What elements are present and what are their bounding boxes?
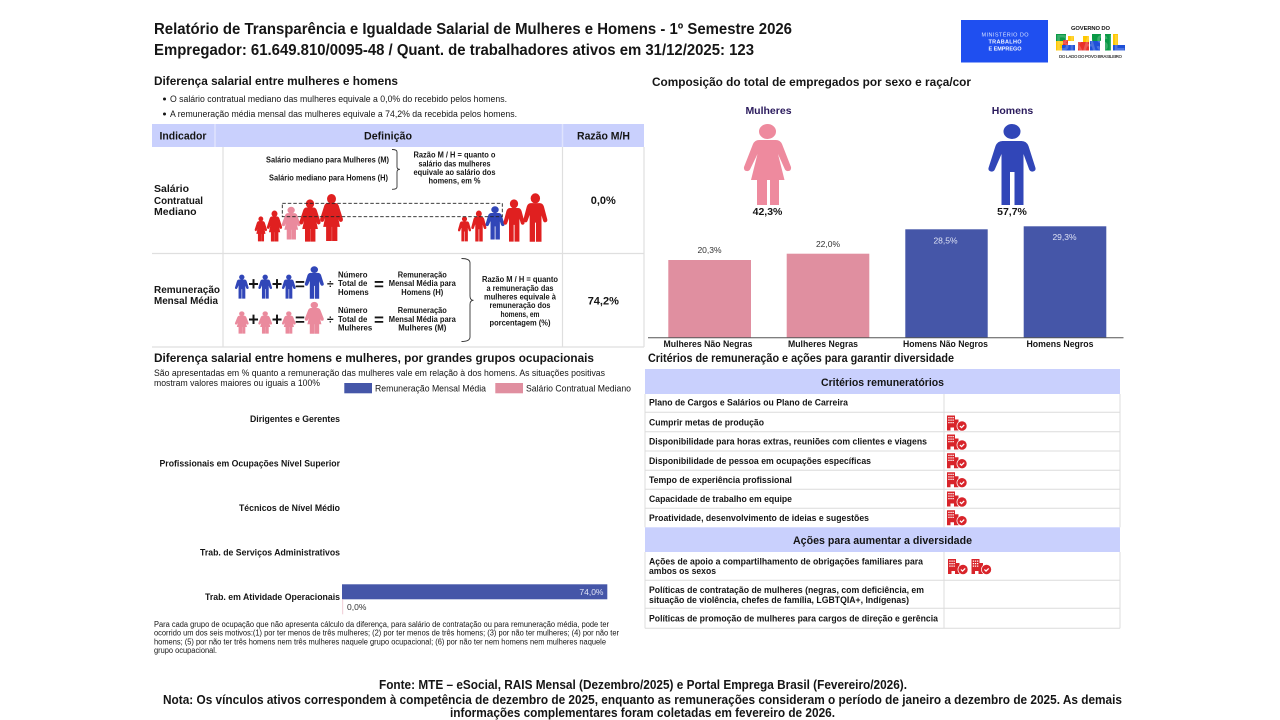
median salary definition: Salário mediano para Mulheres (M): [266, 156, 389, 164]
bar: mulheres não negras: [664, 245, 753, 349]
median salary definition: Razão M / H = quanto o: [414, 150, 496, 160]
logo: Governo do Brasil: GOVERNO DO: [1071, 26, 1110, 32]
bar chart: grupos ocupacionais: Dirigentes e Gerentes: [250, 414, 340, 424]
source and notes: Nota: Os vínculos ativos correspondem à competência de dezembro de 2025, enquanto as remunerações consideram o período de janeiro a dezembro de 2025. As demais: [163, 692, 1122, 707]
actions list: ambos os sexos: [649, 566, 716, 576]
average pay explanation: Razão M / H = quanto: [482, 275, 558, 284]
men average formula: Número: [338, 270, 368, 280]
median salary definition: homens, em %: [428, 176, 481, 186]
women average formula: Mulheres (M): [398, 324, 447, 332]
men average formula: Mensal Média para: [389, 279, 456, 288]
women average formula: ÷: [327, 312, 334, 326]
heading: critérios: Critérios de remuneração e ações para garantir diversidade: [648, 351, 954, 365]
section header: ações: Ações para aumentar a diversidade: [793, 535, 972, 547]
source and notes: Fonte: MTE – eSocial, RAIS Mensal (Dezembro/2025) e Portal Emprega Brasil (Fevereiro/2026).: [379, 677, 907, 692]
bar chart: grupos ocupacionais: Técnicos de Nível Médio: [239, 503, 341, 513]
logo: Ministério do Trabalho e Emprego: TRABALHO: [988, 40, 1022, 46]
table header: Razão M/H: [577, 130, 630, 142]
women average formula: +: [272, 310, 282, 330]
women average formula: Mulheres: [338, 324, 373, 332]
summary bullets: O salário contratual mediano das mulheres equivale a 0,0% do recebido pelos homens.: [170, 94, 507, 104]
chart description: mostram valores maiores ou iguais a 100%: [154, 378, 320, 388]
women average formula: =: [295, 310, 305, 330]
average pay explanation: [462, 258, 558, 342]
men average formula: ÷: [327, 277, 334, 291]
summary bullets: [163, 94, 517, 119]
men average formula: +: [272, 274, 282, 294]
value: razão remuneração média: 74,2%: [588, 296, 619, 308]
table header: Definição: [364, 130, 412, 142]
bar chart: grupos ocupacionais: [160, 414, 607, 614]
men average formula: +: [248, 274, 259, 294]
average pay explanation: mulheres equivale à: [484, 292, 557, 302]
men average formula: Homens (H): [401, 288, 444, 297]
logo: Ministério do Trabalho e Emprego: [961, 20, 1048, 62]
criteria list: [649, 398, 927, 523]
icons: men ranked by salary: [458, 194, 547, 241]
criteria list: Proatividade, desenvolvimento de ideias e sugestões: [649, 513, 869, 523]
logo: Ministério do Trabalho e Emprego: MINISTÉRIO DO: [982, 32, 1029, 38]
heading: ocupacionais: Diferença salarial entre homens e mulheres, por grandes grupos ocupacionais: [154, 351, 594, 365]
panel: indicators table: [152, 124, 644, 347]
logo: Ministério do Trabalho e Emprego: E EMPREGO: [988, 46, 1022, 52]
bar: homens não negros: Homens Não Negros: [903, 339, 988, 349]
criteria list: Capacidade de trabalho em equipe: [649, 494, 792, 504]
footnote: ocorrido um dos seis motivos:(1) por ter menos de três mulheres; (2) por ter menos de três homens; (3) por não ter mulheres; (4) por não ter: [154, 629, 619, 638]
footnote: [154, 620, 619, 655]
chart description: [154, 368, 606, 388]
row label: remuneração mensal média: Mensal Média: [154, 295, 218, 307]
title: [154, 21, 792, 59]
bar: homens negros: 29,3%: [1052, 232, 1077, 242]
bar: mulheres não negras: Mulheres Não Negras: [664, 339, 753, 349]
footnote: Para cada grupo de ocupação que não apresenta cálculo da diferença, para salário de contratação ou para remuneração média, pode ter: [154, 620, 609, 629]
bar: salário operacionais: [342, 599, 367, 614]
title: Empregador: 61.649.810/0095-48 / Quant. de trabalhadores ativos em 31/12/2025: 123: [154, 42, 754, 59]
company icons: actions: [948, 559, 992, 575]
logo: Governo do Brasil: BRASIL: [1056, 30, 1125, 56]
average pay explanation: remuneração dos: [490, 301, 551, 310]
women average formula: Número: [338, 306, 368, 315]
footnote: homens; (5) por não ter três homens nem três mulheres naquele grupo ocupacional; (6) por não ter nem homens nem mulheres naquele: [154, 637, 606, 646]
row label: remuneração mensal média: [154, 284, 220, 307]
source and notes: informações complementares foram coletadas em fevereiro de 2026.: [450, 705, 835, 720]
summary bullets: A remuneração média mensal das mulheres equivale a 74,2% da recebida pelos homens.: [170, 109, 517, 119]
men average formula: =: [374, 275, 384, 294]
actions list: situação de violência, chefes de família, LGBTQIA+, Indígenas): [649, 595, 909, 605]
men average formula: Total de: [338, 279, 368, 288]
bar: mulheres negras: Mulheres Negras: [788, 339, 858, 349]
actions list: Políticas de contratação de mulheres (negras, com deficiência, em: [649, 585, 924, 595]
bar chart: composição por sexo e raça: [648, 226, 1124, 349]
bar: homens negros: [1024, 226, 1106, 349]
bar: remuneração operacionais: 74,0%: [579, 587, 604, 597]
table header: Indicador: [160, 130, 207, 142]
pictogram: mulheres: Mulheres: [745, 105, 792, 117]
company icons: criteria: [947, 416, 967, 526]
median salary definition: Salário mediano para Homens (H): [269, 174, 388, 182]
women average formula: Mensal Média para: [389, 315, 456, 324]
pictogram: homens: [988, 105, 1036, 218]
bar: salário operacionais: 0,0%: [347, 602, 367, 612]
women average formula: [235, 302, 456, 333]
criteria list: Disponibilidade de pessoa em ocupações específicas: [649, 456, 871, 466]
title: Relatório de Transparência e Igualdade Salarial de Mulheres e Homens - 1º Semestre 2026: [154, 21, 792, 38]
men average formula: Remuneração: [398, 270, 447, 280]
table header: [160, 130, 630, 142]
chart description: São apresentadas em % quanto a remuneração das mulheres vale em relação à dos homens. As situações positivas: [154, 368, 606, 378]
men average formula: =: [295, 275, 305, 294]
legend: Remuneração Mensal Média: [375, 384, 486, 394]
footnote: grupo ocupacional.: [154, 646, 217, 655]
row label: salário contratual mediano: Salário: [154, 183, 189, 195]
bar: mulheres não negras: 20,3%: [697, 245, 722, 255]
section header: critérios remuneratórios: Critérios remuneratórios: [821, 377, 944, 389]
men average formula: Homens: [338, 288, 369, 297]
average pay explanation: a remuneração das: [486, 284, 554, 293]
median salary definition: equivale ao salário dos: [414, 168, 496, 177]
women average formula: Total de: [338, 315, 368, 324]
pictogram: homens: Homens: [992, 105, 1033, 117]
actions list: Ações de apoio a compartilhamento de obrigações familiares para: [649, 557, 923, 567]
men average formula: [235, 267, 456, 298]
bar: homens negros: Homens Negros: [1026, 339, 1094, 349]
pictogram: homens: 57,7%: [997, 206, 1028, 218]
value: razão salário contratual: 0,0%: [591, 195, 616, 207]
row label: salário contratual mediano: Contratual: [154, 195, 203, 207]
logo: Governo do Brasil: DO LADO DO POVO BRASILEIRO: [1059, 54, 1122, 59]
criteria list: Tempo de experiência profissional: [649, 475, 792, 485]
row label: remuneração mensal média: Remuneração: [154, 284, 220, 296]
bar: mulheres negras: 22,0%: [816, 239, 840, 249]
pictogram: mulheres: 42,3%: [753, 206, 783, 218]
bar: remuneração operacionais: [342, 584, 607, 599]
women average formula: =: [374, 310, 384, 330]
bar chart: grupos ocupacionais: Trab. de Serviços Administrativos: [200, 548, 340, 558]
women average formula: +: [248, 310, 259, 330]
heading: diferença salarial: Diferença salarial entre mulheres e homens: [154, 74, 398, 88]
row label: salário contratual mediano: Mediano: [154, 206, 197, 218]
bar chart: grupos ocupacionais: Trab. em Atividade Operacionais: [205, 592, 340, 602]
bar chart: grupos ocupacionais: Profissionais em Ocupações Nível Superior: [160, 458, 341, 468]
bar: mulheres negras: [787, 239, 869, 349]
logo: Governo do Brasil: [1056, 26, 1125, 59]
criteria list: Plano de Cargos e Salários ou Plano de Carreira: [649, 398, 848, 408]
bar: homens não negros: 28,5%: [933, 236, 958, 246]
actions list: [649, 557, 938, 624]
actions list: Políticas de promoção de mulheres para cargos de direção e gerência: [649, 614, 938, 624]
median salary definition: salário das mulheres: [418, 159, 491, 168]
pictogram: mulheres: [744, 105, 792, 218]
row label: salário contratual mediano: [154, 183, 203, 218]
average pay explanation: porcentagem (%): [490, 318, 551, 328]
median salary definition: [266, 150, 496, 189]
average pay explanation: homens, em: [500, 310, 540, 319]
icons: women ranked by salary: [255, 195, 342, 241]
women average formula: Remuneração: [398, 306, 447, 315]
bar: homens não negros: [903, 229, 988, 349]
criteria list: Disponibilidade para horas extras, reuniões com clientes e viagens: [649, 436, 927, 446]
panel: criteria table: [645, 369, 1120, 628]
source and notes: [163, 677, 1122, 720]
legend: Salário Contratual Mediano: [526, 384, 631, 394]
legend: [344, 383, 631, 394]
heading: composição: Composição do total de empregados por sexo e raça/cor: [652, 75, 971, 89]
criteria list: Cumprir metas de produção: [649, 418, 765, 428]
